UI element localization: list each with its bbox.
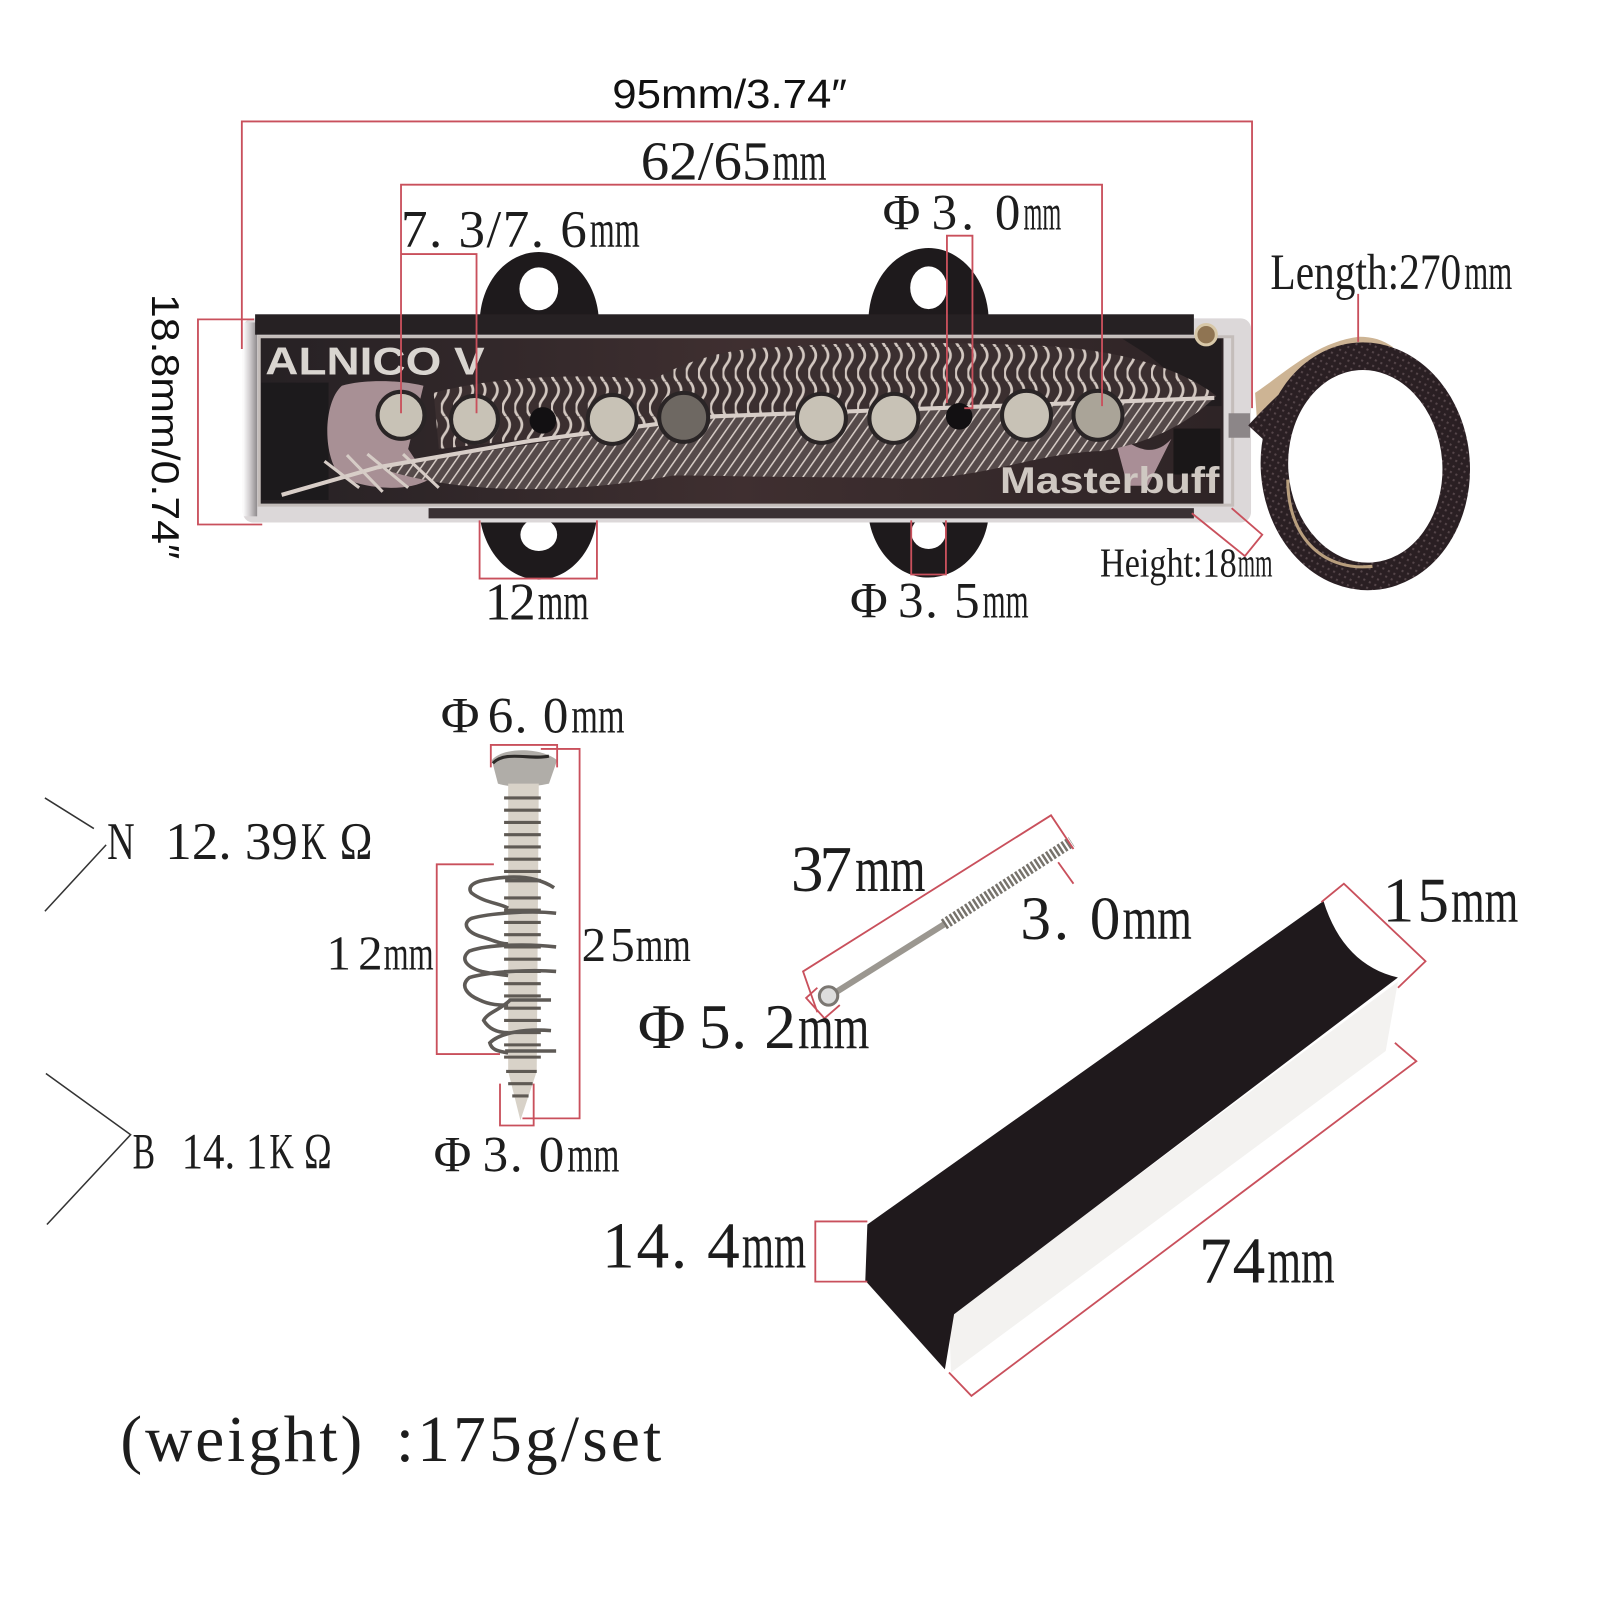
weight note: :175g/set [396, 1404, 661, 1476]
label: screw tip: 3. 0 [483, 1127, 564, 1183]
label: cable length: Length:270 [1270, 245, 1461, 301]
label: cable height: Height:18 [1100, 541, 1237, 586]
label: foam width: 15 [1383, 865, 1449, 935]
pickup assembly [243, 248, 1251, 580]
label: cable height: mm [1238, 541, 1273, 586]
bridge resistance: Ω [304, 1124, 332, 1180]
pickup body [243, 314, 1251, 522]
label: pole spacing: mm [590, 201, 640, 259]
long screw dimension lines [803, 815, 1073, 1018]
threaded shaft [508, 784, 539, 1120]
mounting holes [519, 266, 947, 551]
label: screw tip: mm [567, 1127, 619, 1183]
bridge resistance: K [269, 1124, 294, 1180]
brand text Masterbuff: Masterbuff [1000, 460, 1220, 501]
label: mount hole diameter: mm [983, 573, 1029, 629]
label: screw head: mm [571, 689, 624, 745]
label: mount hole diameter: 3. 5 [898, 573, 980, 629]
label: pole spacing: 7. 3/7. 6 [401, 201, 587, 259]
label: foam height: mm [742, 1210, 806, 1282]
label: foam length: mm [1267, 1226, 1335, 1298]
label: screw hole diameter: 3. 0 [932, 186, 1020, 242]
neck resistance: Ω [340, 813, 372, 871]
mounting screw with spring [465, 750, 557, 1120]
label: screw hole diameter: Φ [883, 186, 920, 242]
bridge resistance: 14. 1 [182, 1124, 267, 1180]
pickup dimension lines [198, 121, 1358, 579]
label: mount hole diameter: Φ [850, 573, 888, 629]
label: pole span: 62/65 [641, 131, 770, 192]
label: long screw length: 37 [791, 834, 852, 906]
coiled lead wire [1255, 337, 1464, 583]
label: foam width: mm [1451, 865, 1518, 935]
foam pad [865, 901, 1398, 1372]
spring coils [465, 877, 556, 1053]
brand text ALNICO V: ALNICO V [265, 340, 485, 383]
label: long screw head: 5. 2 [699, 992, 796, 1062]
label: screw length: mm [636, 917, 691, 972]
label: screw head: Φ [441, 689, 480, 745]
label: long screw length: mm [855, 834, 926, 906]
label: ear width: mm [538, 573, 589, 631]
screw head [492, 750, 557, 787]
foam dimension lines [815, 884, 1426, 1396]
label: long screw thread: mm [1122, 885, 1192, 953]
weight note: (weight) [120, 1404, 362, 1476]
label: long screw thread: 3. 0 [1020, 885, 1120, 953]
label: body width: 18.8mm/0.74″ [143, 294, 186, 559]
feather engraving [282, 343, 1216, 495]
mounting ears bottom [480, 515, 989, 580]
neck resistance [45, 798, 372, 911]
label: long screw head: Φ [638, 992, 686, 1062]
bridge resistance: B [133, 1124, 155, 1180]
text: mm [1023, 186, 1061, 242]
label: spring length: 12 [327, 925, 383, 980]
label: ear width: 12 [485, 573, 536, 631]
long pole screw [819, 842, 1071, 1005]
label: cable length: mm [1464, 245, 1512, 301]
neck resistance: 12. 39 [165, 813, 298, 871]
label: spring length: mm [384, 925, 434, 980]
label: foam height: 14. 4 [602, 1210, 740, 1282]
screw holes [530, 403, 972, 434]
label: foam length: 74 [1199, 1226, 1265, 1298]
screw dimension lines [437, 745, 580, 1126]
label: screw tip: Φ [434, 1127, 471, 1183]
label: pole span: mm [772, 131, 827, 192]
neck resistance: N [107, 813, 135, 871]
label: screw length: 25 [582, 917, 635, 972]
mounting ears top [480, 248, 989, 324]
label: long screw head: mm [798, 992, 869, 1062]
label: overall length: 95mm/3.74″ [612, 71, 847, 117]
bridge resistance [46, 1073, 332, 1224]
neck resistance: K [301, 813, 327, 871]
pole pieces [378, 391, 1122, 444]
label: screw head: 6. 0 [488, 689, 568, 745]
